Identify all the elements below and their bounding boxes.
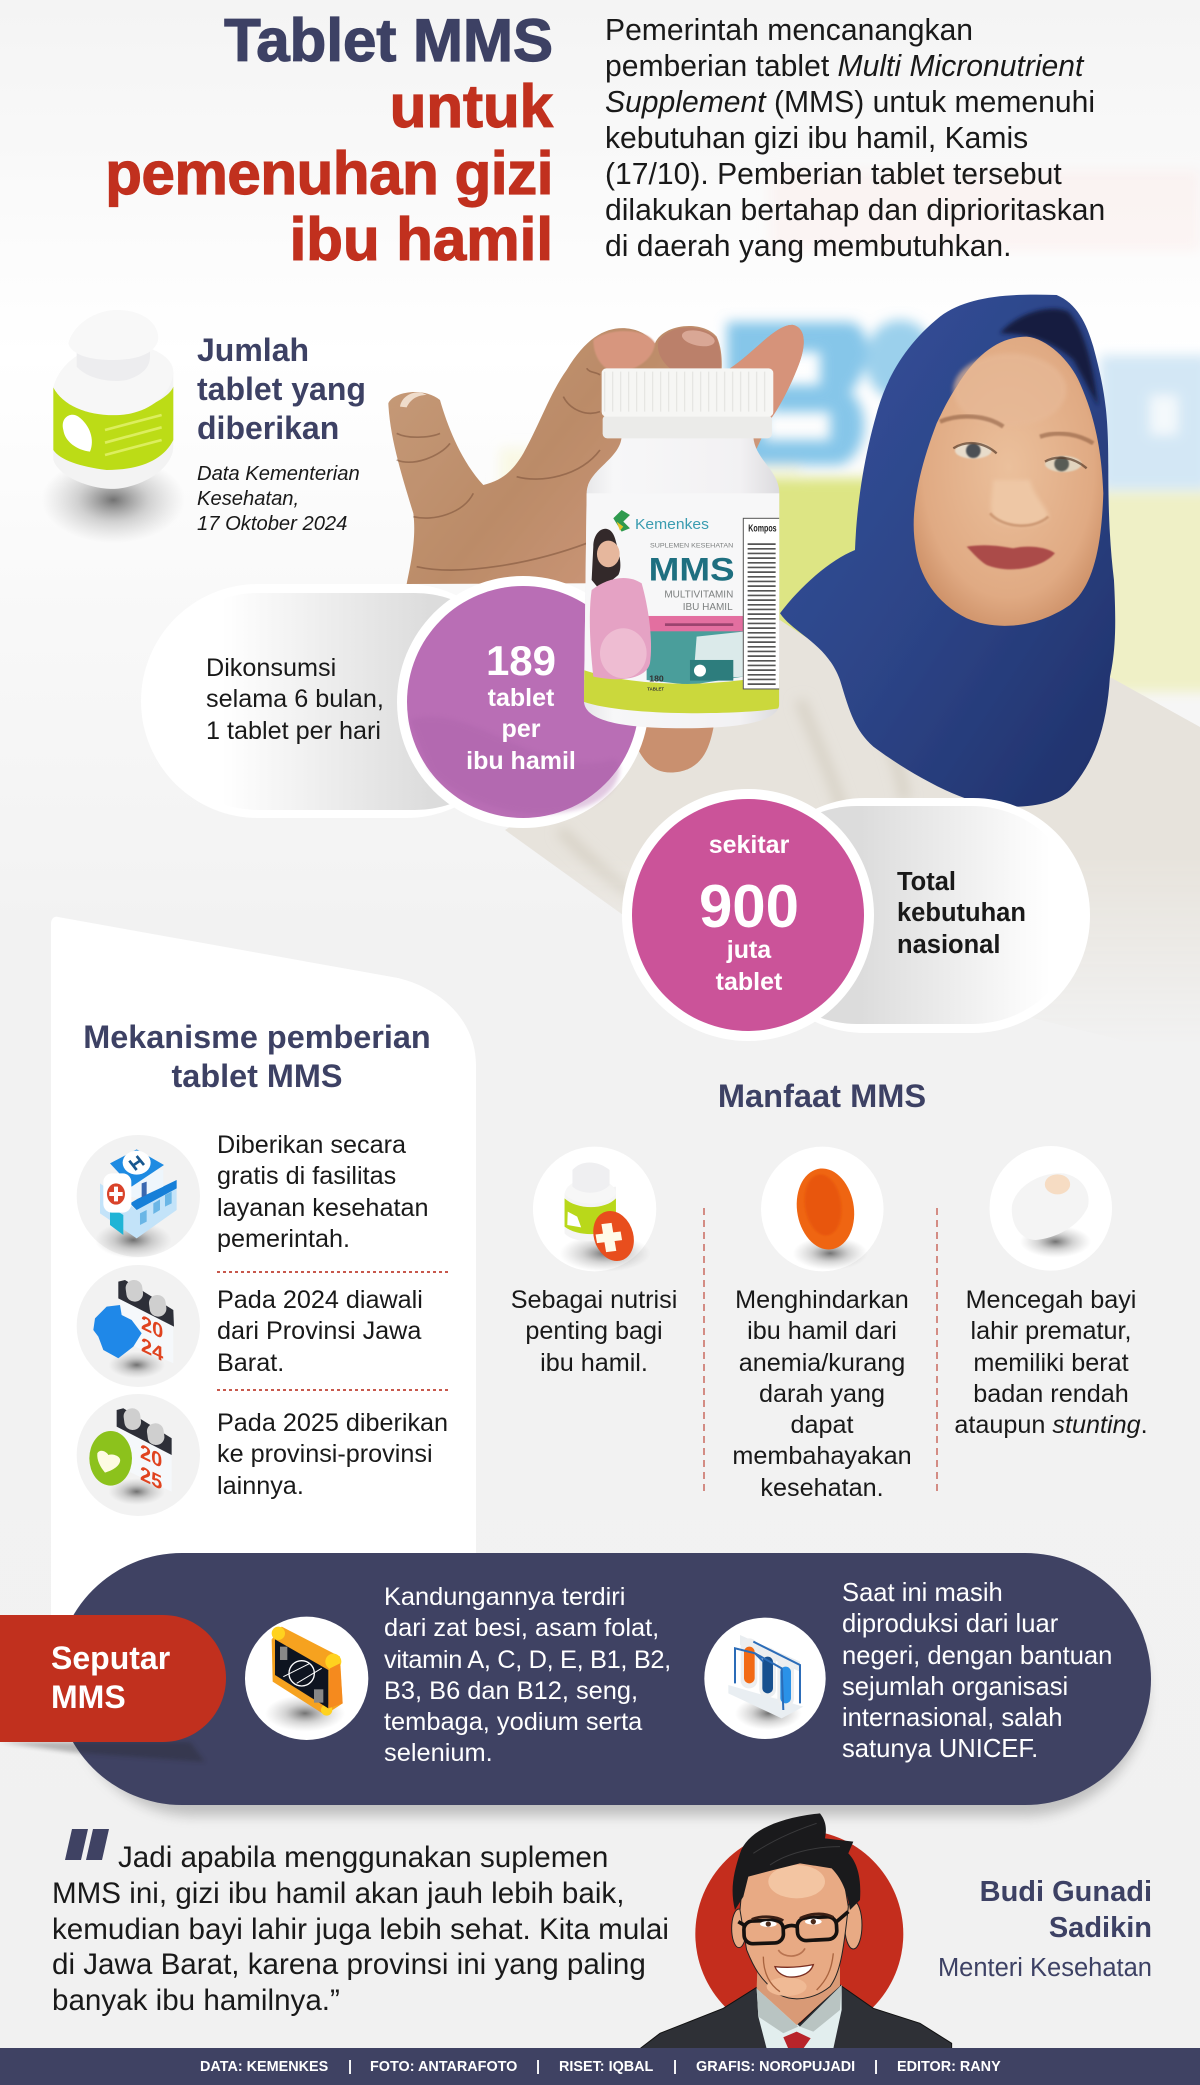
intro paragraph: di daerah yang membutuhkan. (605, 230, 1012, 263)
icon: 2024 calendar (77, 1265, 200, 1387)
intro paragraph: (17/10). Pemberian tablet tersebut (605, 158, 1062, 191)
mechanism item 1: gratis di fasilitas (217, 1162, 396, 1190)
speaker name (980, 1876, 1152, 1944)
mechanism white panel (51, 917, 476, 1660)
source note (89, 463, 632, 1483)
neck (757, 1963, 840, 2025)
text: total need: nasional (897, 931, 1000, 959)
text: composition: selenium. (384, 1739, 493, 1767)
benefit 2: dapat (790, 1411, 854, 1439)
benefit 2: Menghindarkan (735, 1286, 909, 1314)
speaker name: Sadikin (1049, 1912, 1152, 1944)
benefit 2: membahayakan (732, 1442, 912, 1470)
quote: MMS ini, gizi ibu hamil akan jauh lebih baik, (52, 1877, 624, 1910)
bottle label text: MMS (649, 552, 735, 588)
title: untuk (390, 73, 553, 140)
text: consumption: 1 tablet per hari (206, 717, 381, 745)
source note: 17 Oktober 2024 (197, 513, 347, 535)
text: production: diproduksi dari luar (842, 1610, 1058, 1638)
benefit 2: ibu hamil dari (747, 1317, 897, 1345)
title (105, 7, 554, 273)
red circle (695, 1830, 903, 2038)
stat: 189 tablet per ibu hamil: per (502, 715, 540, 743)
footer bar (0, 2048, 1200, 2085)
heading: mekanisme: Mekanisme pemberian (83, 1019, 431, 1055)
benefit 3: Mencegah bayi (966, 1286, 1136, 1314)
benefit icons (533, 1146, 1112, 1272)
hair (733, 1813, 860, 1910)
icon: red blood cell (761, 1147, 884, 1271)
text: consumption: Dikonsumsi (206, 654, 336, 682)
headscarf (780, 295, 1115, 807)
tab label: seputar MMS (51, 1640, 170, 1715)
bottle label text: TABLET (647, 687, 664, 692)
benefit 2: kesehatan. (760, 1474, 884, 1502)
mechanism item 2: Barat. (217, 1349, 284, 1377)
heading: mekanisme (83, 1019, 431, 1094)
mechanism item 3 (217, 1409, 448, 1500)
footer credits: EDITOR: RANY (897, 2059, 1001, 2075)
mechanism item 1: Diberikan secara (217, 1131, 406, 1159)
shirt and tie (757, 1985, 842, 2049)
icon: 2025 calendar: 25 (140, 1462, 162, 1495)
icon: 2025 calendar: 20 (140, 1440, 162, 1473)
speaker role: Menteri Kesehatan (938, 1954, 1152, 1982)
mechanism item 1: pemerintah. (217, 1225, 350, 1253)
icon: test tubes (704, 1618, 826, 1739)
footer credits: GRAFIS: NOROPUJADI (696, 2059, 855, 2075)
text: composition: Kandungannya terdiri (384, 1583, 625, 1611)
intro paragraph: Supplement (MMS) untuk memenuhi (605, 86, 1095, 119)
jar icon (42, 310, 185, 543)
intro paragraph (605, 14, 1105, 263)
stat: sekitar 900 juta tablet: juta (727, 936, 771, 964)
icon: microchip (245, 1617, 368, 1740)
red tab (0, 1615, 226, 1742)
title: ibu hamil (290, 206, 553, 273)
bottle label text: IBU HAMIL (683, 602, 733, 613)
text: production: satunya UNICEF. (842, 1735, 1038, 1763)
mechanism item 3: lainnya. (217, 1472, 304, 1500)
bottle label text: MULTIVITAMIN (664, 590, 733, 601)
text: production: negeri, dengan bantuan (842, 1642, 1112, 1670)
speaker name: Budi Gunadi (980, 1876, 1152, 1908)
benefit 2: darah yang (759, 1380, 885, 1408)
red tab shadow (0, 1742, 205, 1762)
icon: 2024 calendar: 24 (141, 1334, 163, 1366)
bottle logo (613, 510, 709, 533)
intro paragraph: pemberian tablet Multi Micronutrient (605, 50, 1083, 83)
text: composition: tembaga, yodium serta (384, 1708, 642, 1736)
text: composition (384, 1583, 671, 1767)
source note: Data Kementerian (197, 463, 360, 485)
dashed dividers (704, 1208, 937, 1496)
bottle label text: 180 (649, 674, 664, 684)
quote (52, 1814, 886, 2017)
heading: jumlah tablet: Jumlah (197, 332, 309, 368)
blurred backdrop banner (500, 170, 1200, 692)
benefit 3: badan rendah (973, 1380, 1129, 1408)
footer credits: FOTO: ANTARAFOTO (370, 2059, 517, 2075)
text: total need (897, 868, 1026, 959)
stat: sekitar 900 juta tablet: tablet (716, 968, 782, 996)
benefit 1: Sebagai nutrisi (511, 1286, 677, 1314)
text: composition: dari zat besi, asam folat, (384, 1614, 659, 1642)
mechanism item 3: Pada 2025 diberikan (217, 1409, 448, 1437)
icon: 2024 calendar: 20 (141, 1311, 163, 1344)
quote: banyak ibu hamilnya.” (52, 1984, 340, 2017)
benefit 3: lahir prematur, (970, 1317, 1132, 1345)
text: consumption (89, 589, 632, 1483)
title: pemenuhan gizi (105, 140, 553, 207)
benefit 2: anemia/kurang (739, 1349, 905, 1377)
heading: jumlah tablet (89, 332, 778, 1483)
mechanism item 2: Pada 2024 diawali (217, 1286, 423, 1314)
text: composition: vitamin A, C, D, E, B1, B2, (384, 1646, 671, 1674)
intro paragraph: dilakukan bertahap dan diprioritaskan (605, 194, 1105, 227)
footer credits: RISET: IQBAL (559, 2059, 653, 2075)
bottle logo: Kemenkes (635, 517, 709, 533)
quote: kemudian bayi lahir juga lebih sehat. Kita mulai (52, 1913, 669, 1946)
icon: 2025 calendar (77, 1394, 200, 1516)
benefit 1: penting bagi (525, 1317, 663, 1345)
bottle label text: SUPLEMEN KESEHATAN (650, 542, 734, 549)
sleeve and clothing (506, 620, 1200, 972)
benefit 3 (954, 1286, 1148, 1439)
text: composition: B3, B6 dan B12, seng, (384, 1677, 638, 1705)
intro paragraph: Pemerintah mencanangkan (605, 14, 973, 47)
supplement bottle (583, 368, 783, 728)
navy panel (56, 1553, 1151, 1805)
text: total need: Total (897, 868, 956, 896)
navy pill shadow (72, 1570, 1147, 1816)
nose and smile (763, 1948, 833, 1992)
text: total need: kebutuhan (897, 899, 1026, 927)
ears (732, 1909, 746, 1948)
eyebrows and eyes (752, 1914, 833, 1927)
benefit 3: ataupun stunting. (954, 1411, 1148, 1439)
stat: 189 tablet per ibu hamil (466, 637, 713, 775)
bottle mother figure (590, 529, 651, 679)
mechanism item 1 (217, 1131, 428, 1253)
text: consumption: selama 6 bulan, (206, 685, 384, 713)
heading: mekanisme: tablet MMS (172, 1058, 342, 1094)
portrait: minister illustration (640, 1813, 952, 2049)
stat: sekitar 900 juta tablet: sekitar (709, 831, 789, 859)
icon: jar with plus (533, 1147, 656, 1272)
mechanism item 1: layanan kesehatan (217, 1194, 428, 1222)
icon: white pill (989, 1146, 1112, 1271)
mechanism icons (77, 1135, 200, 1516)
stat: 189 tablet per ibu hamil: ibu hamil (466, 747, 576, 775)
benefit 1 (511, 1286, 677, 1377)
text: production (842, 1579, 1112, 1763)
photo: woman holding MMS bottle (388, 294, 1200, 972)
bottle label text: Kompos (748, 524, 777, 535)
quote: di Jawa Barat, karena provinsi ini yang paling (52, 1948, 646, 1981)
source note: Kesehatan, (197, 488, 299, 510)
tab label: seputar MMS: Seputar (51, 1640, 170, 1676)
pill: 189 tablet (141, 576, 649, 828)
footer credits: | (536, 2059, 540, 2075)
footer credits: DATA: KEMENKES (200, 2059, 328, 2075)
mechanism item 3: ke provinsi-provinsi (217, 1440, 433, 1468)
stat: sekitar 900 juta tablet (699, 831, 799, 996)
stat: sekitar 900 juta tablet: 900 (699, 873, 799, 940)
title: Tablet MMS (224, 7, 553, 74)
bottle label text (647, 524, 777, 692)
hand (388, 325, 804, 773)
glasses (738, 1912, 848, 1944)
text: production: Saat ini masih (842, 1579, 1003, 1607)
footer credits: | (673, 2059, 677, 2075)
footer credits: | (874, 2059, 878, 2075)
text: production: sejumlah organisasi (842, 1673, 1068, 1701)
icon: hospital (77, 1135, 200, 1258)
pill: 900 juta tablet (622, 789, 1090, 1041)
mechanism item 2 (217, 1286, 423, 1377)
text: production: internasional, salah (842, 1704, 1063, 1732)
face (914, 337, 1103, 626)
footer credits: | (348, 2059, 352, 2075)
dark shade under scarf (1000, 309, 1098, 407)
heading: jumlah tablet: diberikan (197, 410, 339, 446)
footer credits (200, 2059, 1001, 2075)
mechanism item 2: dari Provinsi Jawa (217, 1317, 421, 1345)
stat: 189 tablet per ibu hamil: tablet (488, 684, 554, 712)
tab label: seputar MMS: MMS (51, 1679, 126, 1715)
benefit 3: memiliki berat (973, 1349, 1129, 1377)
heading: manfaat: Manfaat MMS (718, 1077, 926, 1114)
stat: 189 tablet per ibu hamil: 189 (486, 637, 556, 684)
suit (640, 1985, 952, 2049)
intro paragraph: kebutuhan gizi ibu hamil, Kamis (605, 122, 1028, 155)
heading: jumlah tablet: tablet yang (197, 371, 366, 407)
benefit 1: ibu hamil. (540, 1349, 648, 1377)
face (740, 1858, 848, 1999)
benefit 2 (732, 1286, 912, 1502)
quote: Jadi apabila menggunakan suplemen (118, 1841, 608, 1874)
quote mark (65, 1829, 109, 1860)
